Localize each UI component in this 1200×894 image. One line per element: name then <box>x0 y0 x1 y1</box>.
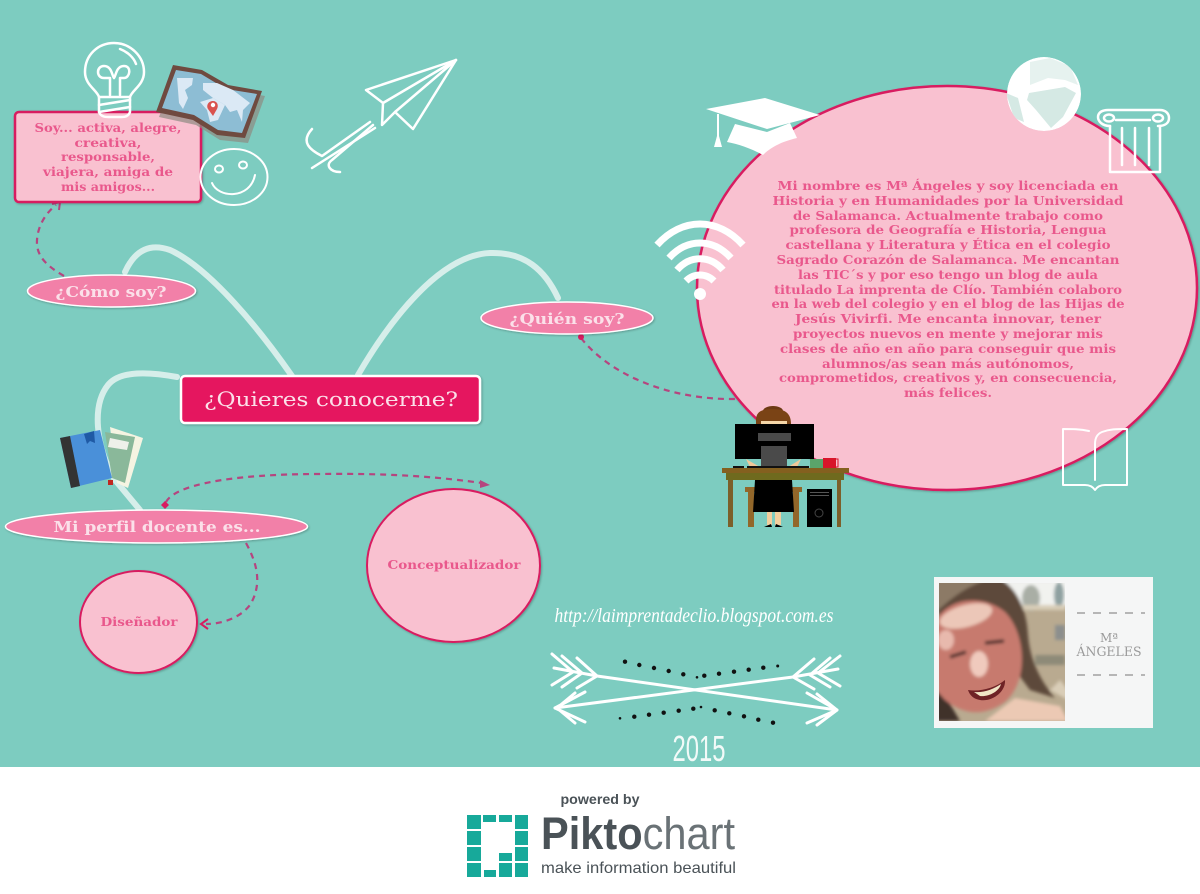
text block: biography: Sagrado Corazón de Salamanca. Me encantan <box>776 253 1120 267</box>
node: quién soy <box>481 302 653 334</box>
dashed arrow: perfil docente to conceptualizador <box>161 474 490 509</box>
node: mi perfil docente <box>6 510 308 543</box>
text block: biography: Historia y en Humanidades por la Universidad <box>772 194 1124 208</box>
text block: biography: más felices. <box>904 386 992 400</box>
node: cómo soy <box>28 275 196 307</box>
node: diseñador <box>80 571 197 673</box>
text block: biography: proyectos nuevos en mente y mejorar mis <box>793 327 1103 341</box>
text block: personality: responsable, <box>61 150 155 164</box>
text block: biography: titulado La imprenta de Clío. También colaboro <box>774 283 1122 297</box>
text block: biography: castellana y Literatura y Ética en el colegio <box>786 237 1110 252</box>
card name <box>1076 613 1145 675</box>
panel: photo card <box>934 577 1153 728</box>
icon: smiley <box>200 149 268 205</box>
node: conceptualizador <box>367 489 540 642</box>
icon: paper plane <box>307 60 456 172</box>
icon: globe <box>1006 57 1081 131</box>
title box <box>181 376 480 423</box>
icon: wifi <box>657 224 743 300</box>
dashed arrow: cómo soy to description <box>37 202 64 276</box>
url text: http://laimprentadeclio.blogspot.com.es <box>554 605 834 627</box>
text block: biography <box>772 178 1125 400</box>
year: 2015 <box>672 728 726 769</box>
icon: light bulb <box>85 43 144 117</box>
dots: bottom row <box>619 706 775 725</box>
text block: biography: Jesús Vivirfi. Me encanta innovar, tener <box>794 312 1102 326</box>
icon: graduation cap <box>706 98 820 155</box>
title box: ¿Quieres conocerme? <box>204 387 458 411</box>
footer <box>0 767 1200 894</box>
text block: personality <box>34 121 182 194</box>
text block: biography: de Salamanca. Actualmente trabajo como <box>793 209 1103 223</box>
icon: ionic column <box>1098 110 1169 172</box>
text block: biography: alumnos/as sean más autónomos, <box>822 357 1074 371</box>
text block: personality: viajera, amiga de <box>42 165 173 179</box>
powered by: powered by <box>560 791 640 807</box>
text block: personality: mis amigos... <box>61 180 155 194</box>
node: mi perfil docente: Mi perfil docente es... <box>54 518 260 536</box>
text block: biography: Mi nombre es Mª Ángeles y soy licenciada en <box>778 178 1119 193</box>
card name: Mª <box>1100 631 1118 645</box>
logo mark <box>467 815 528 877</box>
dashed arrow: quién soy to biography <box>578 334 735 399</box>
dots: top row <box>623 660 779 679</box>
text block: biography: profesora de Geografía e Historia, Lengua <box>790 223 1107 237</box>
text block: biography: las TIC´s y por eso tengo un blog de aula <box>798 268 1098 282</box>
icon: books <box>60 427 143 488</box>
icon: open book <box>1063 429 1127 490</box>
photo: portrait <box>936 580 1070 721</box>
icon: map <box>156 65 265 143</box>
card name: ÁNGELES <box>1076 644 1142 660</box>
text block: biography: clases de año en año para conseguir que mis <box>780 342 1116 356</box>
dashed arrow: perfil docente to diseñador <box>201 543 257 629</box>
panel: description box <box>15 112 201 202</box>
node: cómo soy: ¿Cómo soy? <box>56 283 167 301</box>
node: diseñador: Diseñador <box>100 615 178 629</box>
connector curves <box>98 247 558 510</box>
logo wordmark: Piktochart <box>541 808 735 859</box>
illustration: woman at desk <box>722 406 849 527</box>
text block: personality: Soy... activa, alegre, <box>34 121 182 135</box>
text block: biography: comprometidos, creativos y, en consecuencia, <box>779 371 1117 385</box>
tagline: make information beautiful <box>541 860 736 877</box>
node: conceptualizador: Conceptualizador <box>388 558 521 572</box>
text block: biography: en la web del colegio y en el blog de las Hijas de <box>772 297 1125 311</box>
decoration: crossed arrows <box>552 654 840 725</box>
panel: about me circle <box>697 86 1197 490</box>
text block: personality: creativa, <box>74 136 142 150</box>
node: quién soy: ¿Quién soy? <box>510 310 625 328</box>
